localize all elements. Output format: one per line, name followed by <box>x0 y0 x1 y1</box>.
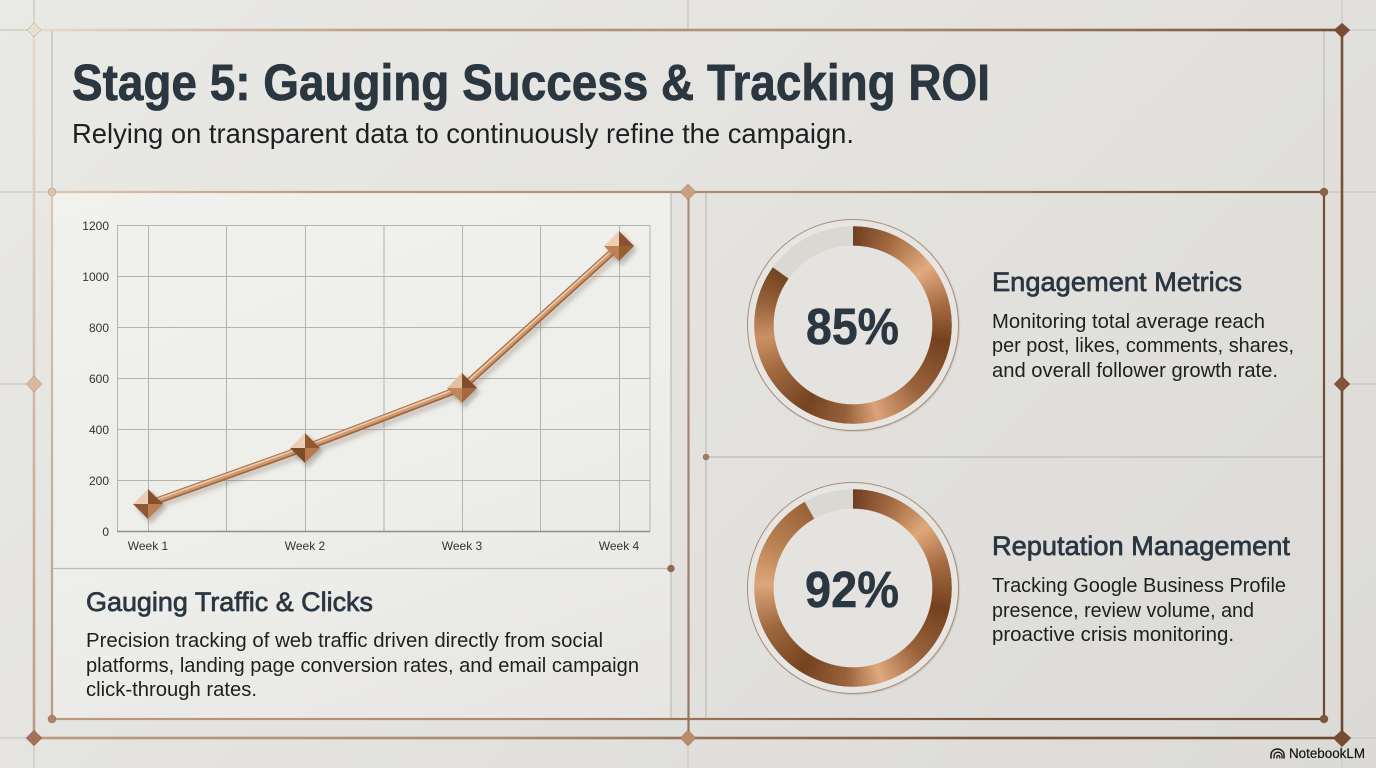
left panel background <box>53 193 671 718</box>
body text: Tracking Google Business Profile <box>992 574 1286 597</box>
chart grid <box>117 226 650 532</box>
panel text: gauging traffic and clicks <box>86 587 639 701</box>
copper trend line <box>148 244 622 508</box>
x axis labels: Week 3 <box>442 539 483 553</box>
heading: Gauging Traffic & Clicks <box>86 587 373 617</box>
NotebookLM watermark: NotebookLM <box>1289 746 1365 761</box>
body text <box>992 310 1294 382</box>
body text: presence, review volume, and <box>992 599 1254 622</box>
body text: click-through rates. <box>86 678 257 701</box>
heading: Reputation Management <box>992 531 1290 561</box>
x axis labels: Week 4 <box>599 539 640 553</box>
line chart: weekly traffic <box>82 219 650 553</box>
title: Stage 5: Gauging Success & Tracking ROI <box>72 54 990 111</box>
x axis labels: Week 2 <box>285 539 326 553</box>
body text: platforms, landing page conversion rates, and email campaign <box>86 654 639 677</box>
gauge: 92 percent <box>747 482 960 695</box>
y axis labels: 400 <box>89 423 109 437</box>
body text: and overall follower growth rate. <box>992 359 1278 382</box>
data point markers <box>133 231 637 524</box>
x axis labels: Week 1 <box>128 539 169 553</box>
reputation management text <box>992 531 1290 646</box>
y axis labels: 1000 <box>82 270 109 284</box>
y axis labels: 600 <box>89 372 109 386</box>
body text <box>86 629 639 701</box>
gauge: 92 percent: 92% <box>805 561 899 618</box>
x axis labels <box>128 539 640 553</box>
y axis labels: 800 <box>89 321 109 335</box>
header <box>72 54 990 149</box>
body text: Precision tracking of web traffic driven directly from social <box>86 629 603 652</box>
engagement metrics text <box>992 267 1294 382</box>
body text <box>992 574 1286 646</box>
body text: Monitoring total average reach <box>992 310 1265 333</box>
body text: proactive crisis monitoring. <box>992 623 1234 646</box>
gauge: 85 percent: 85% <box>806 298 899 355</box>
y axis labels: 0 <box>102 525 109 539</box>
gauge: 85 percent <box>747 219 960 432</box>
body text: per post, likes, comments, shares, <box>992 334 1294 357</box>
y axis labels: 1200 <box>82 219 109 233</box>
heading: Engagement Metrics <box>992 267 1242 297</box>
subtitle: Relying on transparent data to continuously refine the campaign. <box>72 118 854 149</box>
y axis labels: 200 <box>89 474 109 488</box>
icon: NotebookLM logo <box>1271 749 1284 758</box>
y axis labels <box>82 219 109 539</box>
